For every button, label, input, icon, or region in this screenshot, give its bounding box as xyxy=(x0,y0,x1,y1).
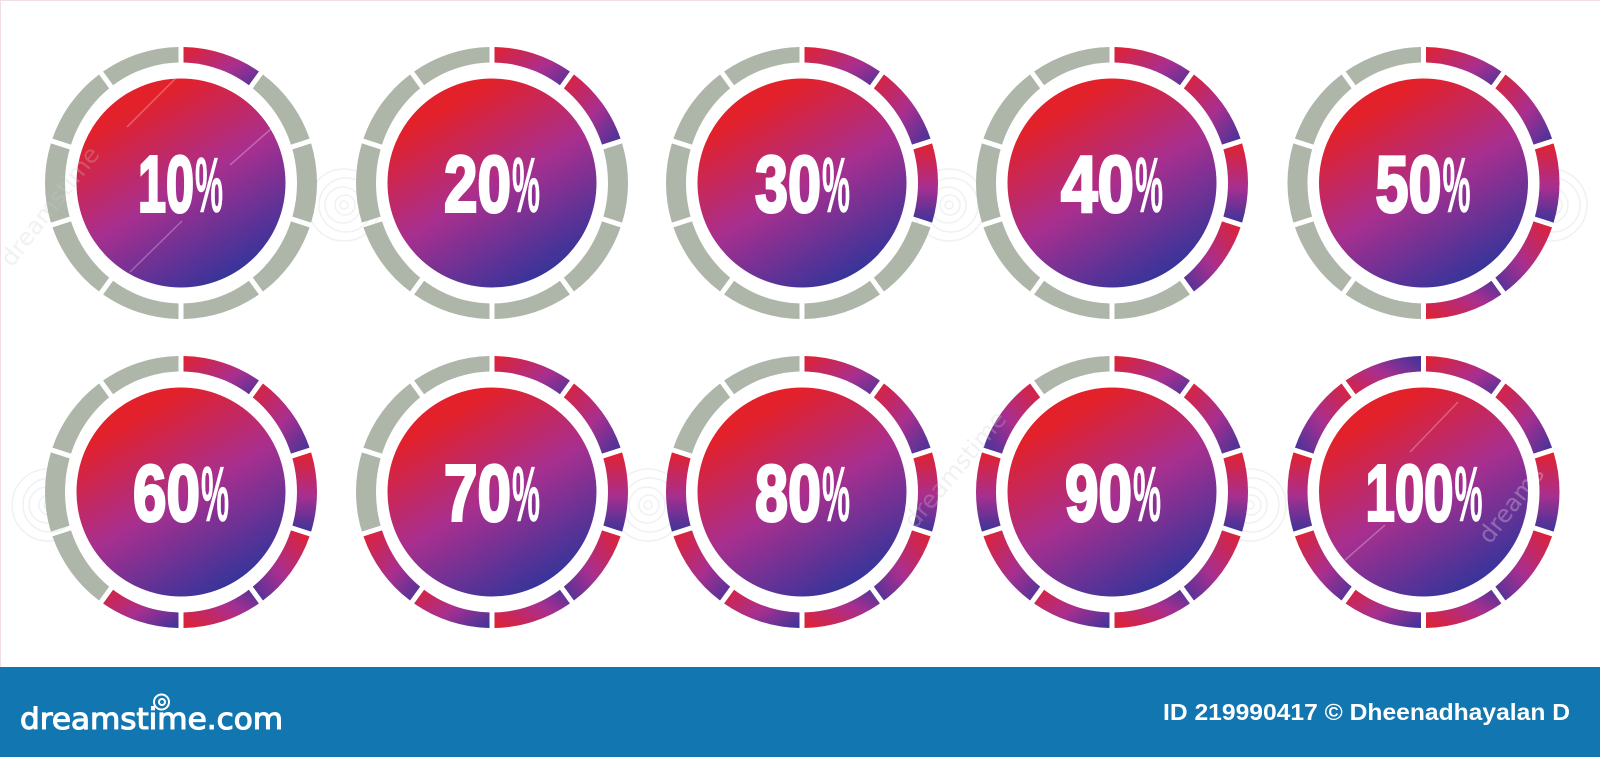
gauge 20% xyxy=(356,47,628,319)
white inner disc xyxy=(376,372,608,612)
label: 30 xyxy=(755,140,821,228)
footer band xyxy=(0,667,1600,757)
gauge 20%: % xyxy=(512,141,540,229)
dial xyxy=(698,78,906,288)
white inner disc xyxy=(1308,372,1540,612)
dial xyxy=(1008,388,1216,596)
gauge 60% xyxy=(45,356,317,628)
logo wordmark: dreamstime.com xyxy=(20,702,283,736)
gauge 30% xyxy=(666,47,938,319)
gauge 10% xyxy=(45,47,317,319)
ring segments xyxy=(666,356,938,628)
ring segments xyxy=(45,47,317,319)
white inner disc xyxy=(996,372,1228,612)
ring segments xyxy=(1287,356,1560,628)
dial xyxy=(1319,388,1528,596)
gauge 60%: % xyxy=(201,450,229,538)
dial xyxy=(388,78,596,288)
watermark text and lines: dreamstime xyxy=(898,405,1012,534)
image credit: ID 219990417 © Dheenadhayalan D xyxy=(1163,699,1570,725)
white inner disc xyxy=(65,372,297,612)
gauge 100%: % xyxy=(1454,450,1482,538)
watermark text and lines: dreams xyxy=(1473,461,1550,549)
ring segments xyxy=(1287,47,1560,319)
gauge 70%: % xyxy=(512,450,540,538)
dial xyxy=(388,388,596,596)
white inner disc xyxy=(686,62,918,304)
dial xyxy=(76,388,286,596)
label: 50 xyxy=(1376,140,1442,228)
label: 10 xyxy=(138,140,194,228)
label: 60 xyxy=(133,448,200,538)
label: 20 xyxy=(444,140,511,228)
logo spiral icon xyxy=(154,694,169,710)
white inner disc xyxy=(1308,62,1540,304)
dial xyxy=(698,388,906,596)
gauge 90%: % xyxy=(1133,450,1161,538)
gauge 80% xyxy=(666,356,938,628)
white inner disc xyxy=(996,62,1228,304)
gauge 80%: % xyxy=(822,450,850,538)
gauge 30%: % xyxy=(822,141,850,229)
label: 40 xyxy=(1061,140,1134,228)
watermark spirals xyxy=(12,169,1587,541)
dial xyxy=(1008,78,1216,288)
white inner disc xyxy=(376,62,608,304)
watermark text and lines xyxy=(0,78,1550,560)
white inner disc xyxy=(686,372,918,612)
gauge 40% xyxy=(976,47,1248,319)
ring segments xyxy=(356,47,628,319)
gauge 40%: % xyxy=(1135,141,1163,229)
label: 100 xyxy=(1366,448,1454,538)
white inner disc xyxy=(65,62,297,304)
ring segments xyxy=(45,356,317,628)
ring segments xyxy=(976,47,1248,319)
ring segments xyxy=(976,356,1248,628)
dial xyxy=(1319,78,1528,288)
gauge 50%: % xyxy=(1442,141,1470,229)
gauge 90% xyxy=(976,356,1248,628)
gauge 100% xyxy=(1287,356,1560,628)
gauge 50% xyxy=(1287,47,1560,319)
dial xyxy=(76,78,286,288)
label: 90 xyxy=(1065,448,1132,538)
gauge 10%: % xyxy=(195,141,223,229)
label: 70 xyxy=(444,448,511,538)
gauge 70% xyxy=(356,356,628,628)
ring segments xyxy=(666,47,938,319)
label: 80 xyxy=(755,448,821,538)
ring segments xyxy=(356,356,628,628)
